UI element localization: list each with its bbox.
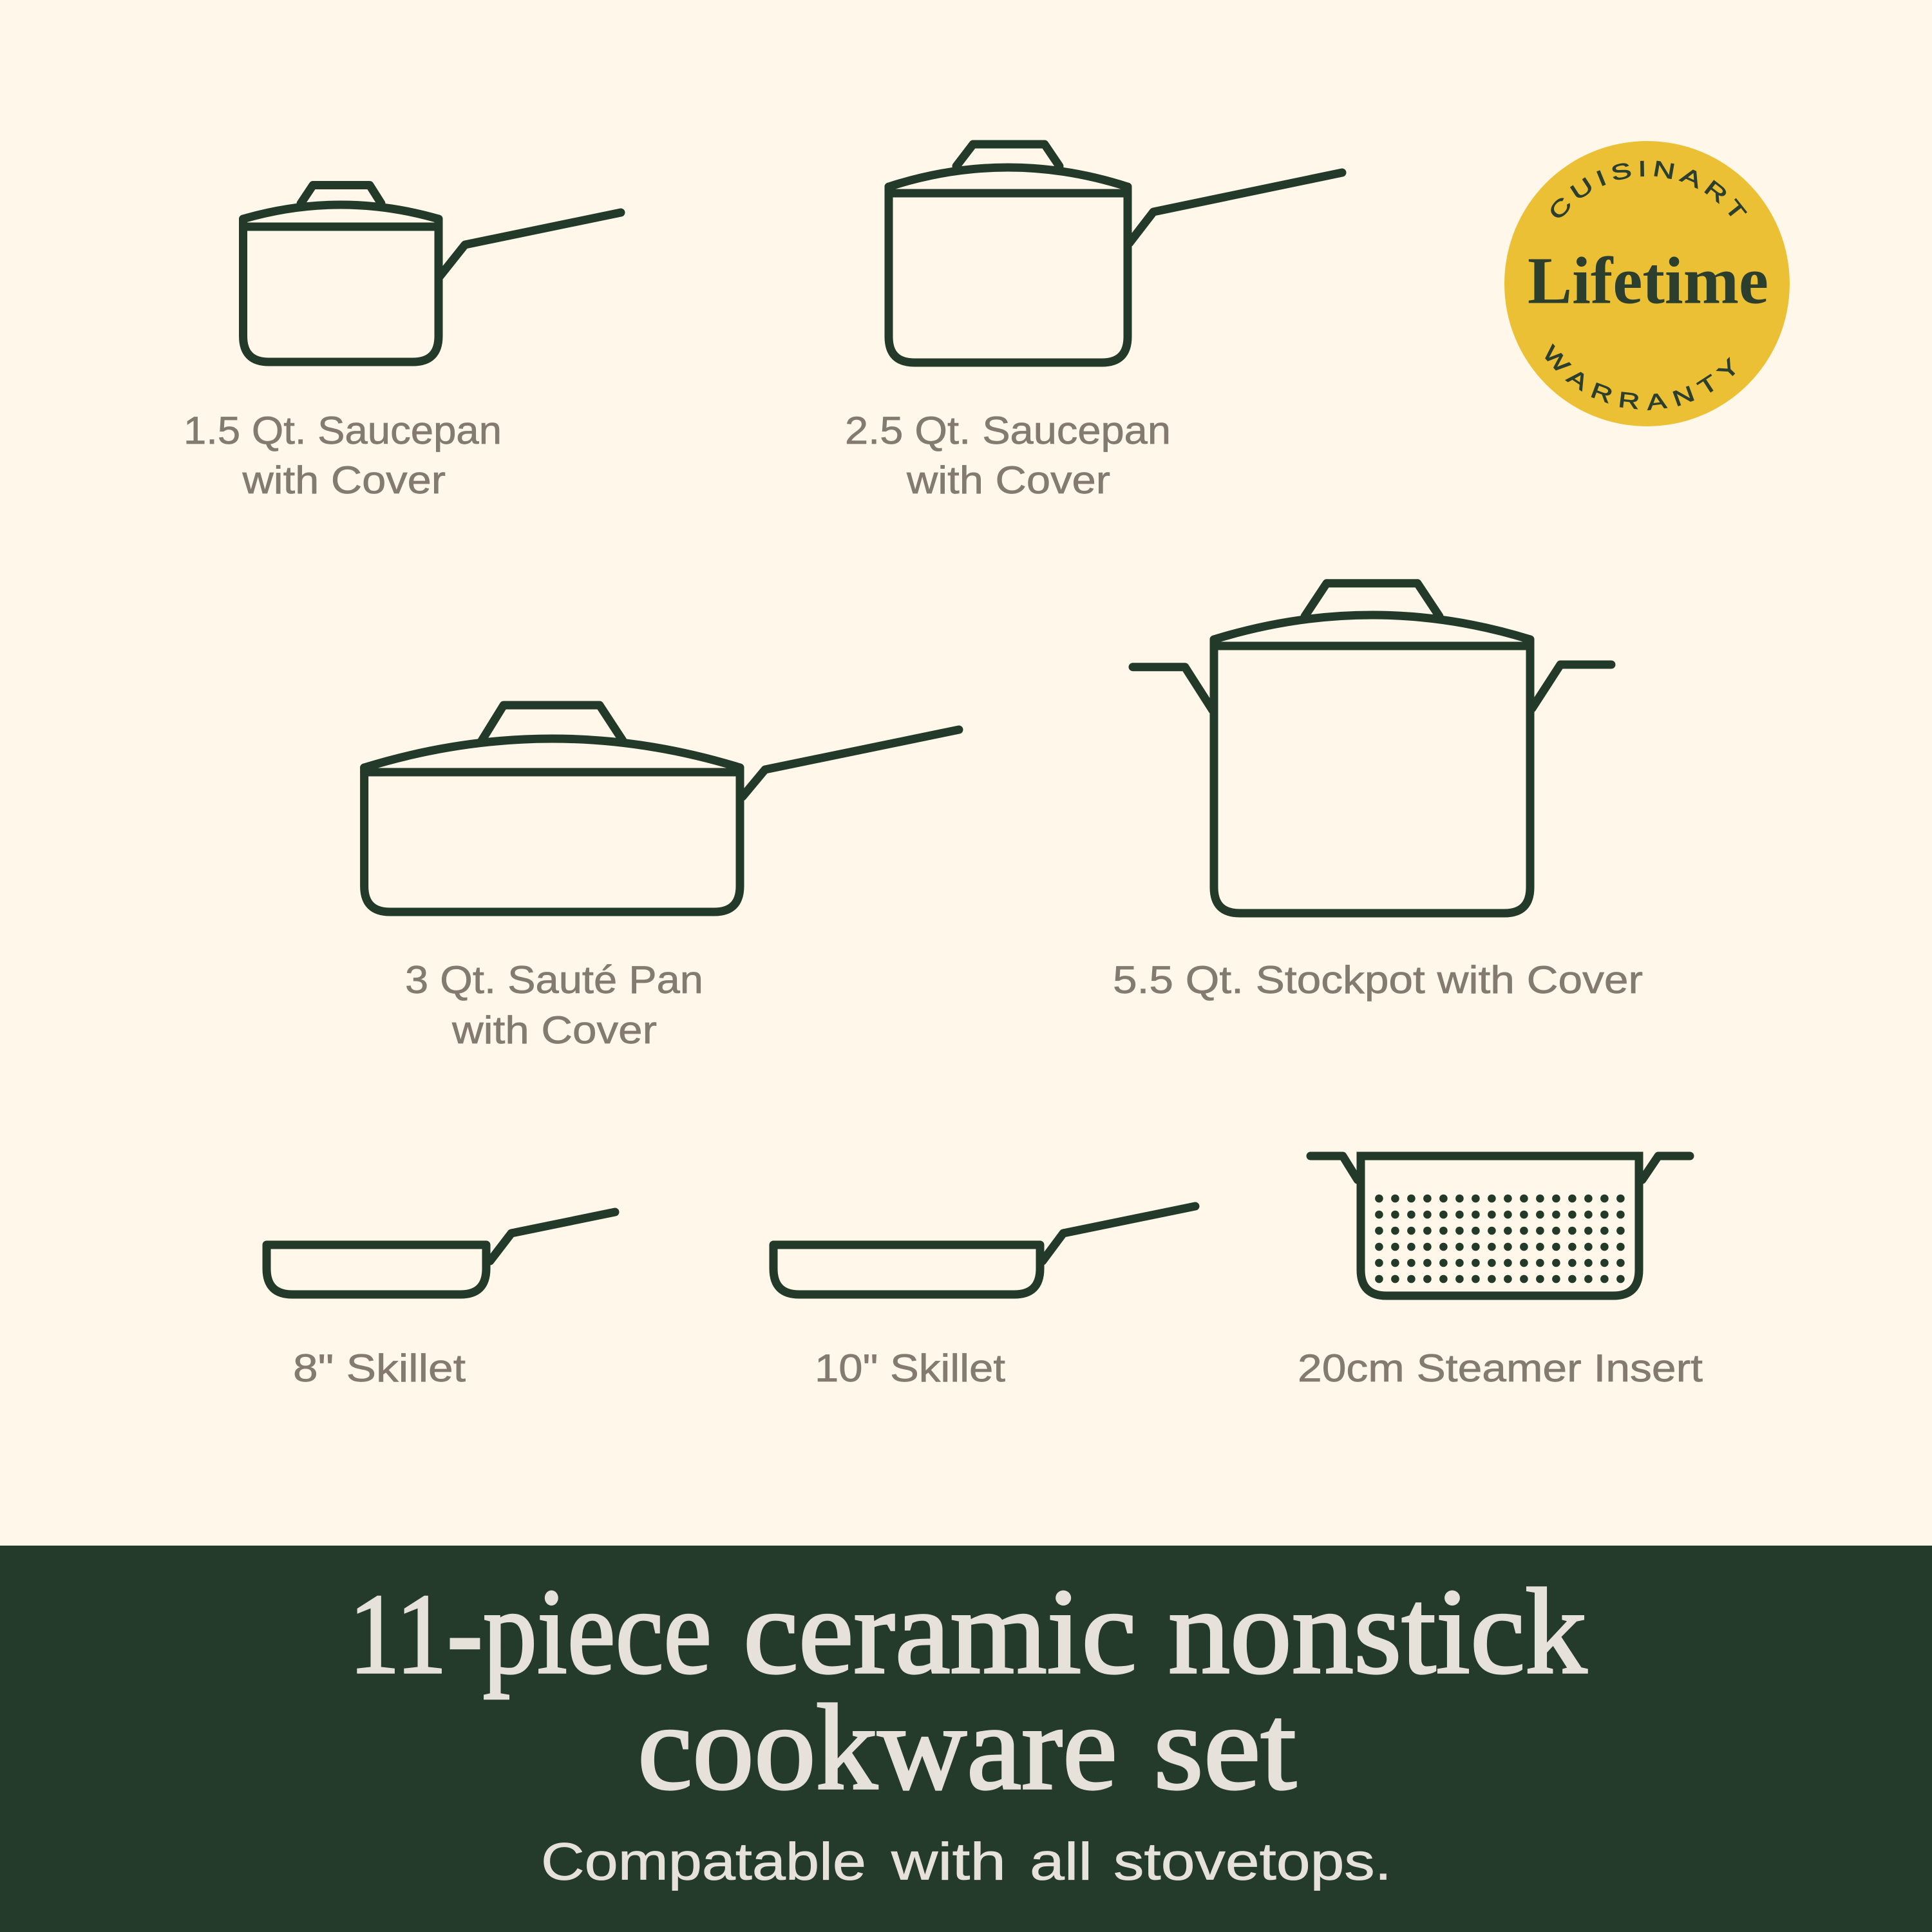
label: 1.5 qt saucepan: with Cover xyxy=(242,459,446,502)
banner title: nonstick xyxy=(1168,1564,1587,1700)
label: 3 qt saute pan: 3 Qt. Sauté Pan xyxy=(405,958,703,1001)
banner subtitle: stovetops. xyxy=(1113,1833,1392,1891)
banner title: set xyxy=(1153,1680,1296,1815)
icon: 5.5 qt stockpot xyxy=(1133,583,1611,913)
banner subtitle xyxy=(541,1833,1392,1891)
banner title: cookware xyxy=(638,1680,1117,1815)
label: 1.5 qt saucepan xyxy=(184,409,502,502)
label: 3 qt saute pan: with Cover xyxy=(451,1009,657,1052)
label: 10 inch skillet: 10" Skillet xyxy=(815,1347,1005,1390)
label: 2.5 qt saucepan xyxy=(845,409,1171,502)
badge: lifetime warranty: CUISINART xyxy=(1551,161,1747,218)
banner title xyxy=(349,1564,1587,1815)
banner title: 11-piece xyxy=(349,1564,712,1700)
label: 5.5 qt stockpot: 5.5 Qt. Stockpot with Cover xyxy=(1113,958,1643,1001)
banner subtitle: with xyxy=(891,1833,1006,1891)
label: 2.5 qt saucepan: with Cover xyxy=(906,459,1110,502)
badge: lifetime warranty: WARRANTY xyxy=(1545,343,1735,411)
label: 1.5 qt saucepan: 1.5 Qt. Saucepan xyxy=(184,409,502,452)
icon: 2.5 qt saucepan xyxy=(889,144,1342,363)
label: 8 inch skillet: 8" Skillet xyxy=(293,1347,466,1390)
label: steamer insert: 20cm Steamer Insert xyxy=(1298,1347,1703,1390)
badge: lifetime warranty: Lifetime xyxy=(1528,244,1768,318)
icon: steamer insert xyxy=(1311,1156,1690,1296)
badge: lifetime warranty xyxy=(1504,141,1790,426)
icon: 3 qt saute pan xyxy=(365,705,959,912)
banner subtitle: all xyxy=(1030,1833,1092,1891)
label: 2.5 qt saucepan: 2.5 Qt. Saucepan xyxy=(845,409,1171,452)
banner subtitle: Compatable xyxy=(541,1833,866,1891)
banner xyxy=(0,1546,1932,1932)
icon: 8 inch skillet xyxy=(267,1212,615,1294)
icon: 10 inch skillet xyxy=(773,1206,1195,1294)
icon: 1.5 qt saucepan xyxy=(243,185,621,362)
label: 3 qt saute pan xyxy=(405,958,703,1052)
banner title: ceramic xyxy=(743,1564,1137,1700)
